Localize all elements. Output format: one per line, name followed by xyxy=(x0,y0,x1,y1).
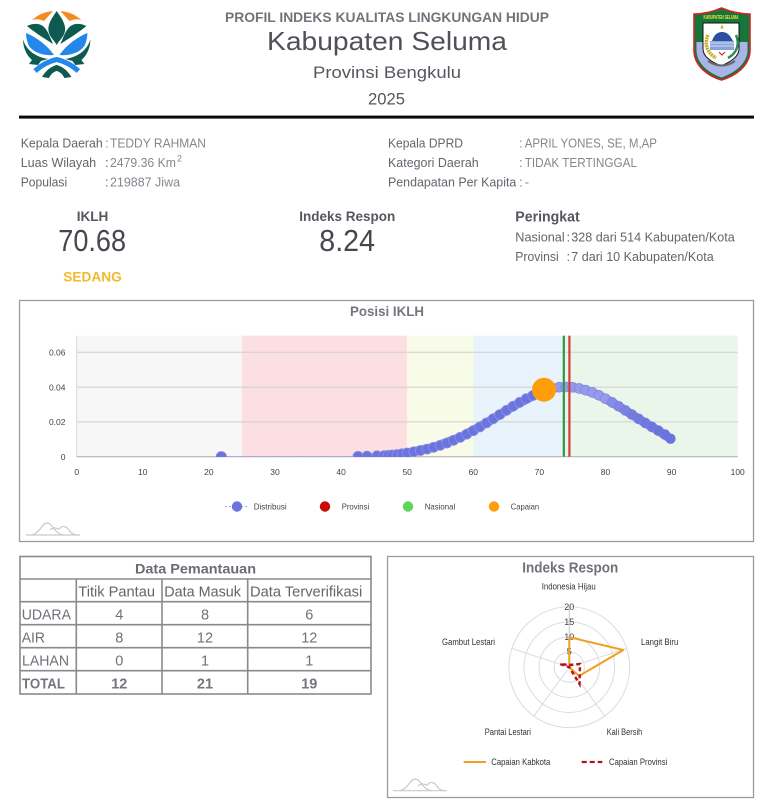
region profile: left column: TEDDY RAHMAN xyxy=(110,136,206,150)
radar axis values: 5 xyxy=(567,646,572,656)
region profile: left column: 2479.36 Km xyxy=(110,155,176,170)
radar chart xyxy=(442,581,678,737)
ranking: Provinsi xyxy=(515,249,559,264)
y-axis labels: 0.06 xyxy=(49,348,66,358)
table row: AIR xyxy=(22,630,317,646)
radar labels: Gambut Lestari xyxy=(442,637,495,647)
table row: AIR: 8 xyxy=(115,630,123,646)
radar labels: Kali Bersih xyxy=(607,727,642,737)
header rule xyxy=(19,116,754,119)
table row: AIR: 12 xyxy=(197,630,213,646)
heading: Indeks Respon: Indeks Respon xyxy=(522,560,618,577)
table row: UDARA: 6 xyxy=(305,607,313,623)
region profile: right column: : xyxy=(519,174,523,190)
data points: distribusi (right of capaian) xyxy=(548,382,676,444)
legend: radar: Capaian Kabkota xyxy=(491,757,550,767)
region profile: left column xyxy=(21,136,206,190)
region profile: left column: : xyxy=(105,155,109,170)
region profile: left column: 219887 Jiwa xyxy=(110,174,181,190)
region profile: left column: Populasi xyxy=(21,174,67,190)
region profile: right column: TIDAK TERTINGGAL xyxy=(525,155,637,170)
region profile: left column: : xyxy=(105,174,109,190)
score: IKLH xyxy=(58,208,126,284)
ranking: Peringkat xyxy=(515,210,580,226)
ranking: : xyxy=(566,249,570,264)
x-axis labels: 10 xyxy=(138,467,148,477)
x-axis labels: 20 xyxy=(204,467,214,477)
table row: UDARA: 4 xyxy=(115,607,123,623)
table row: TOTAL xyxy=(22,676,317,692)
y-axis labels: 0.04 xyxy=(49,382,66,392)
marker: capaian xyxy=(532,378,556,402)
radar labels: Langit Biru xyxy=(641,637,678,647)
header titles: 2025 xyxy=(368,90,405,108)
region profile: right column xyxy=(388,136,657,190)
panel: Posisi IKLH xyxy=(20,300,754,542)
header titles xyxy=(225,9,549,108)
score: Indeks Respon: Indeks Respon xyxy=(299,208,395,224)
x-axis labels: 80 xyxy=(601,467,610,477)
radar axis values: 15 xyxy=(564,617,574,627)
region profile: right column: : xyxy=(519,136,523,150)
region profile: left column: Luas Wilayah xyxy=(21,155,96,170)
legend: chart: Capaian xyxy=(511,502,539,512)
region profile: right column: : xyxy=(519,155,523,170)
table row: TOTAL: 21 xyxy=(197,676,213,692)
x-axis labels: 60 xyxy=(469,467,478,477)
x-axis labels: 30 xyxy=(270,467,280,477)
y-axis labels: 0 xyxy=(61,452,66,462)
region profile: right column: Kepala DPRD xyxy=(388,136,463,150)
region profile: right column: - xyxy=(525,174,529,190)
legend: chart: Distribusi xyxy=(254,502,287,512)
table row: LAHAN: 0 xyxy=(115,653,123,669)
heading: Posisi IKLH: Posisi IKLH xyxy=(350,303,424,319)
legend: radar: Capaian Provinsi xyxy=(609,757,667,767)
table row: UDARA: 8 xyxy=(201,607,209,623)
header titles: Provinsi Bengkulu xyxy=(313,64,461,82)
table row: LAHAN: LAHAN xyxy=(22,653,69,669)
x-axis labels: 0 xyxy=(74,467,79,477)
ranking: 7 dari 10 Kabupaten/Kota xyxy=(571,249,714,264)
table row: TOTAL: 19 xyxy=(301,676,317,692)
table row: AIR: AIR xyxy=(22,630,45,646)
region profile: left column: : xyxy=(105,136,109,150)
x-axis labels: 50 xyxy=(402,467,412,477)
ranking: Nasional xyxy=(515,230,565,245)
legend: chart xyxy=(225,501,539,512)
table row: UDARA xyxy=(22,607,313,623)
table header row xyxy=(78,585,362,601)
logo: Kabupaten Seluma shield xyxy=(694,8,750,80)
series: capaian provinsi xyxy=(560,664,580,684)
score: IKLH: 70.68 xyxy=(58,223,126,258)
ranking xyxy=(515,210,735,264)
region profile: left column: Kepala Daerah xyxy=(21,136,103,150)
chart: distribution curve xyxy=(49,336,745,477)
watermark: radar xyxy=(393,779,447,791)
table: Data Pemantauan xyxy=(20,556,371,694)
x-axis labels: 100 xyxy=(731,467,745,477)
table header row: Data Masuk xyxy=(164,585,242,601)
ranking: 328 dari 514 Kabupaten/Kota xyxy=(571,230,735,245)
region profile: right column: Pendapatan Per Kapita xyxy=(388,174,517,190)
radar labels xyxy=(442,581,678,737)
region profile: right column: APRIL YONES, SE, M,AP xyxy=(525,136,657,150)
header titles: Kabupaten Seluma xyxy=(267,26,508,56)
score: Indeks Respon: 8.24 xyxy=(319,223,375,258)
table row: TOTAL: TOTAL xyxy=(22,676,65,692)
panel: Indeks Respon radar xyxy=(388,556,754,798)
marker: provinsi line xyxy=(568,336,570,457)
score: IKLH: SEDANG xyxy=(63,268,122,284)
radar axis values: 10 xyxy=(564,632,574,642)
logo: Indeks Kualitas Lingkungan Hidup xyxy=(23,11,90,78)
table row: TOTAL: 12 xyxy=(111,676,127,692)
table heading: Data Pemantauan xyxy=(135,560,256,576)
legend: chart: Provinsi xyxy=(342,502,369,512)
region profile: right column: Kategori Daerah xyxy=(388,155,479,170)
region profile: left column: 2 xyxy=(177,154,182,164)
table row: AIR: 12 xyxy=(301,630,317,646)
marker: nasional line xyxy=(563,336,565,457)
legend: chart: Nasional xyxy=(425,502,455,512)
data points: distribusi xyxy=(216,390,537,457)
radar labels: Pantai Lestari xyxy=(485,727,531,737)
ranking: : xyxy=(566,230,570,245)
score: Indeks Respon xyxy=(299,208,395,258)
x-axis labels: 40 xyxy=(336,467,346,477)
table header row: Data Terverifikasi xyxy=(250,585,362,601)
radar labels: Indonesia Hijau xyxy=(542,581,596,591)
table row: LAHAN: 1 xyxy=(305,653,313,669)
y-axis labels xyxy=(49,348,66,462)
legend: radar xyxy=(464,757,667,767)
table row: UDARA: UDARA xyxy=(22,607,71,623)
table row: LAHAN: 1 xyxy=(201,653,209,669)
x-axis labels: 90 xyxy=(667,467,677,477)
x-axis labels: 70 xyxy=(535,467,544,477)
x-axis labels xyxy=(74,467,745,477)
logo: Kabupaten Seluma shield: KABUPATEN SELUMA xyxy=(704,15,739,21)
y-axis labels: 0.02 xyxy=(49,417,66,427)
table row: LAHAN xyxy=(22,653,313,669)
table header row: Titik Pantau xyxy=(78,585,155,601)
radar axis values xyxy=(564,602,574,656)
header titles: PROFIL INDEKS KUALITAS LINGKUNGAN HIDUP xyxy=(225,9,549,25)
watermark: chart xyxy=(26,523,80,535)
score: IKLH: IKLH xyxy=(77,208,108,224)
radar axis values: 20 xyxy=(564,602,574,612)
series: capaian kabkota xyxy=(569,637,623,676)
